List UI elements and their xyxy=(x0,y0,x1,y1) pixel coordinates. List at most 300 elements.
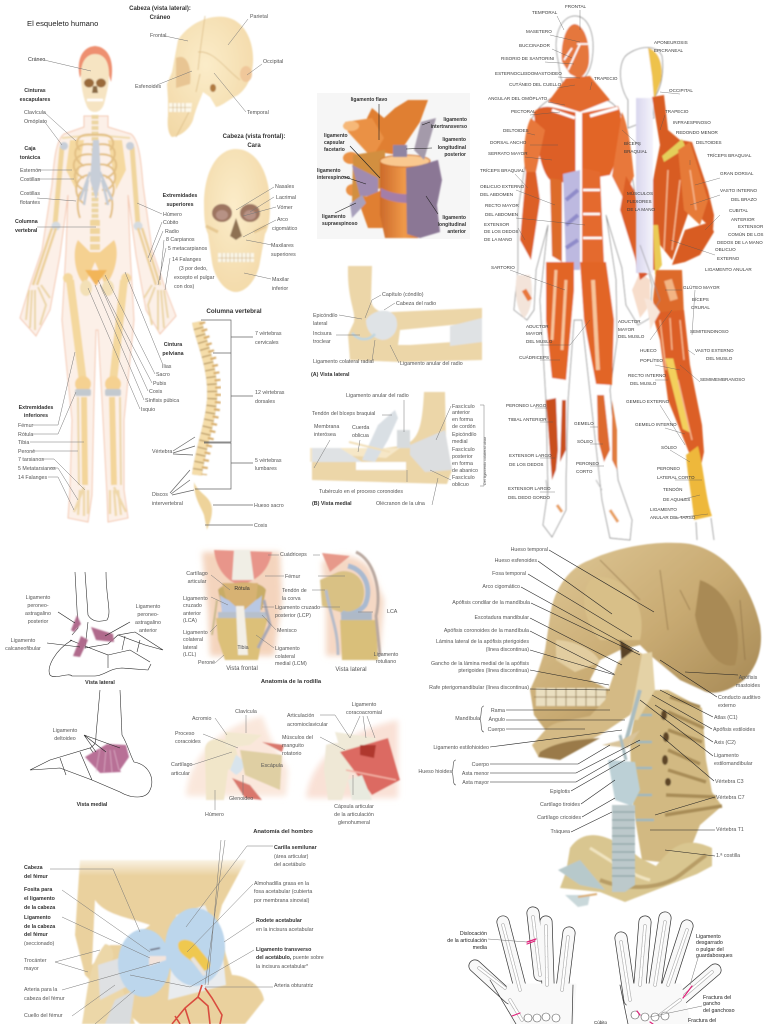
elbow medial labels: Fascículo xyxy=(452,475,475,481)
skeleton labels: Clavícula xyxy=(24,110,46,116)
hip labels: el ligamento xyxy=(24,896,56,902)
elbow medial labels: Tubérculo en el proceso coronoides xyxy=(319,489,403,495)
head and neck labels: pterigoides (línea discontinua) xyxy=(458,668,529,674)
illustration: full skeleton xyxy=(20,46,176,522)
hand right labels: del ganchoso xyxy=(703,1008,735,1014)
elbow lateral labels: Epicóndilo xyxy=(313,313,337,319)
elbow medial labels: posterior xyxy=(452,454,473,460)
skeleton labels: Sínfisis púbica xyxy=(145,398,179,404)
muscle labels: DEDOS DE LA MANO xyxy=(717,240,763,245)
elbow medial labels: Membrana xyxy=(314,424,339,430)
head and neck labels: Apófisis estiloides xyxy=(713,727,755,733)
skeleton leader lines xyxy=(30,60,170,510)
lateral skull labels: Esfenoides xyxy=(135,84,162,90)
muscle labels: CORTO xyxy=(576,469,593,474)
frontal skull labels: inferior xyxy=(272,286,288,292)
muscle labels: INFRAESPINOSO xyxy=(673,120,711,125)
illustration: hand outline left xyxy=(475,913,575,1024)
muscle labels: DEL ABDOMEN xyxy=(485,212,518,217)
muscle labels: FRONTAL xyxy=(565,4,587,9)
muscle labels: TRÍCEPS BRAQUIAL xyxy=(707,152,752,158)
panel: head and neck xyxy=(418,543,761,907)
shoulder labels: Ligamento xyxy=(352,702,376,708)
lateral skull labels: Cráneo xyxy=(150,15,171,21)
elbow medial labels: en forma xyxy=(452,417,473,423)
hand right labels: desgarrado xyxy=(696,940,723,946)
vertebra labels: longitudinal xyxy=(438,145,467,151)
knee labels: cruzado xyxy=(183,603,202,609)
head and neck labels: Apófisis xyxy=(739,675,758,681)
ankle medial labels: Vista medial xyxy=(77,802,108,808)
skeleton labels xyxy=(15,57,215,481)
illustration: vertebrae xyxy=(343,100,442,238)
panel: human skeleton xyxy=(15,19,215,522)
elbow lateral labels xyxy=(311,292,463,378)
hand right labels: gancho xyxy=(703,1001,720,1007)
head and neck labels: Conducto auditivo xyxy=(718,695,760,701)
vertebra labels: ligamento xyxy=(324,133,348,139)
knee labels: anterior xyxy=(183,611,201,617)
muscle labels: DEL MUSLO xyxy=(630,381,657,386)
illustration: larynx and trachea xyxy=(565,730,640,907)
skeleton labels: Radio xyxy=(165,229,179,235)
elbow medial labels: Ligamento anular del radio xyxy=(346,393,409,399)
head and neck labels: Ángulo xyxy=(488,716,505,723)
muscle labels: SÓLEO xyxy=(661,444,677,450)
frontal skull labels xyxy=(223,134,297,292)
illustration: elbow medial xyxy=(310,392,452,484)
shoulder labels: Cartílago xyxy=(171,762,193,768)
skeleton labels: Caja xyxy=(24,146,36,152)
hand right labels: o pulgar del xyxy=(696,947,724,953)
muscle labels: LIGAMENTO xyxy=(650,507,677,512)
muscle labels: TIBIAL ANTERIOR xyxy=(508,417,547,422)
knee labels: medial (LCM) xyxy=(275,661,307,667)
head and neck labels: 1.ª costilla xyxy=(716,853,740,859)
vertebra labels: facetario xyxy=(324,147,345,153)
knee labels: Anatomía de la rodilla xyxy=(261,679,322,685)
muscle labels: DEL MUSLO xyxy=(526,339,553,344)
muscle labels: SERRATO MAYOR xyxy=(488,151,528,156)
head and neck labels: Hueso esfenoides xyxy=(495,558,537,564)
elbow medial labels: Cuerda xyxy=(352,425,369,431)
muscle labels: RISORIO DE SANTORINI xyxy=(501,56,554,61)
head and neck labels: Mandíbula xyxy=(455,716,480,722)
ankle lateral labels: anterior xyxy=(139,628,157,634)
muscle labels: TENDÓN xyxy=(663,486,682,492)
shoulder labels: acromioclavicular xyxy=(287,722,328,728)
elbow lateral leader lines xyxy=(336,295,399,363)
muscle labels: CUTÁNEO DEL CUELLO xyxy=(509,81,562,87)
skeleton labels: Omóplato xyxy=(24,119,47,125)
head and neck labels: Epiglotis xyxy=(550,789,570,795)
muscle labels: BUCCINADOR xyxy=(519,43,551,48)
lateral skull labels: Parietal xyxy=(250,14,268,20)
knee labels: Cuádriceps xyxy=(280,552,307,558)
panel: knee anatomy xyxy=(183,550,398,685)
shoulder labels: Escápula xyxy=(261,763,283,769)
muscle labels: OBLICUO EXTERNO xyxy=(480,184,525,189)
illustration: neck spine and ribs xyxy=(558,690,722,902)
spine brackets xyxy=(170,320,253,525)
panel: hand left xyxy=(447,913,607,1024)
muscle labels: HUECO xyxy=(640,348,657,353)
elbow medial labels: Del ligamento colateral ulnar xyxy=(483,436,487,485)
muscle labels: RECTO MAYOR xyxy=(485,203,519,208)
muscle labels: SARTORIO xyxy=(491,265,515,270)
shoulder labels: glenohumeral xyxy=(338,820,370,826)
elbow medial labels: medial xyxy=(452,439,468,445)
spine labels: dorsales xyxy=(255,399,275,405)
lateral skull labels xyxy=(129,6,283,116)
muscle labels: SEMITENDINOSO xyxy=(690,329,729,334)
skeleton labels: Costillas xyxy=(20,191,40,197)
elbow medial labels: interósea xyxy=(314,432,336,438)
ankle lateral labels: posterior xyxy=(28,619,49,625)
head and neck labels: Rafe pterigomandibular (línea discontinua) xyxy=(429,685,529,691)
frontal skull labels: Nasales xyxy=(275,184,294,190)
shoulder labels: coracoacromial xyxy=(346,710,382,716)
panel: elbow medial view xyxy=(310,392,487,507)
elbow medial labels: Tendón del bíceps braquial xyxy=(312,411,375,417)
knee labels: Vista lateral xyxy=(335,667,367,673)
elbow lateral labels: Cabeza del radio xyxy=(396,301,436,307)
illustration: lateral skull xyxy=(167,16,253,137)
spine labels: 12 vértebras xyxy=(255,390,285,396)
shoulder labels: Húmero xyxy=(205,812,224,818)
muscle labels: ANGULAR DEL OMÓPLATO xyxy=(488,95,548,101)
illustration: ankle bones lateral xyxy=(49,572,163,677)
muscle labels: CUBITAL xyxy=(729,208,749,213)
muscle labels: ESTERNOCLEIDOMASTOIDEO xyxy=(495,71,562,76)
frontal skull labels: Maxilar xyxy=(272,277,289,283)
spine labels: lumbares xyxy=(255,466,277,472)
knee labels: la corva xyxy=(282,596,301,602)
muscle labels: TRÍCEPS BRAQUIAL xyxy=(480,167,525,173)
illustration: frontal knee xyxy=(202,550,282,660)
ligament patches lateral xyxy=(71,615,114,657)
muscle labels: BÍCEPS xyxy=(692,296,709,302)
skeleton labels: Húmero xyxy=(163,212,182,218)
muscle labels: DE LOS DEDOS xyxy=(509,462,543,467)
skeleton labels: Sacro xyxy=(156,372,170,378)
muscle labels: MAYOR xyxy=(526,331,543,336)
vertebra labels: longitudinal xyxy=(438,222,467,228)
elbow medial labels: Fascículo xyxy=(452,447,475,453)
bracket hyoid xyxy=(452,760,456,785)
hip labels: Fosita para xyxy=(24,887,52,893)
hip labels: Arteria para la xyxy=(24,987,57,993)
skeleton labels: Extremidades xyxy=(19,405,53,411)
head and neck labels: mastoides xyxy=(736,683,760,689)
elbow lateral labels: lateral xyxy=(313,321,327,327)
elbow medial labels: oblicua xyxy=(352,433,369,439)
illustration: front muscle figure xyxy=(514,16,652,540)
head and neck labels: Hueso hioides xyxy=(418,769,452,775)
muscle labels: COMÚN DE LOS xyxy=(728,231,763,237)
lateral skull labels: Frontal xyxy=(150,33,166,39)
ankle lateral labels: calcaneofibular xyxy=(5,646,41,652)
muscle labels: ANULAR DEL TARSO xyxy=(650,515,696,520)
head and neck labels: Cartílago tiroides xyxy=(540,802,580,808)
vertebra labels: anterior xyxy=(447,229,466,235)
muscle labels: EXTERNO xyxy=(717,256,740,261)
head and neck labels: estilomandibular xyxy=(714,761,753,767)
muscle labels: EXTENSOR LARGO xyxy=(508,486,551,491)
elbow medial labels: anterior xyxy=(452,410,470,416)
ankle lateral labels: Ligamento xyxy=(136,604,160,610)
muscle labels: TEMPORAL xyxy=(532,10,558,15)
skeleton labels: Columna xyxy=(15,219,38,225)
hand left labels: Dislocación xyxy=(460,931,487,937)
frontal skull labels: Arco xyxy=(277,217,288,223)
head and neck labels: Vértebra C3 xyxy=(715,779,744,785)
skeleton labels: Rótula xyxy=(18,432,33,438)
head and neck labels: Vértebra C7 xyxy=(716,795,745,801)
frontal skull labels: Cabeza (vista frontal): xyxy=(223,134,285,140)
muscle labels: PERONEO xyxy=(576,461,599,466)
illustration: shoulder front xyxy=(186,716,288,800)
knee labels: lateral xyxy=(183,645,197,651)
muscle labels: DORSAL ANCHO xyxy=(490,140,527,145)
vertebra leader lines xyxy=(335,104,438,214)
panel: frontal skull xyxy=(204,134,297,292)
muscle labels: CRURAL xyxy=(691,305,710,310)
lateral skull labels: Cabeza (vista lateral): xyxy=(129,6,191,12)
muscle labels: BÍCEPS xyxy=(624,140,641,146)
ankle medial leader lines xyxy=(84,735,120,752)
illustration: lateral knee xyxy=(320,552,384,660)
vertebra labels: ligamento xyxy=(322,214,346,220)
muscle labels: PERONEO xyxy=(657,466,680,471)
knee labels: (LCL) xyxy=(183,652,196,658)
illustration: obturator arteries xyxy=(172,985,222,1024)
skeleton labels: Ilias xyxy=(162,364,172,370)
muscle labels xyxy=(480,4,764,520)
hip labels: Ligamento transverso xyxy=(256,947,312,953)
hip labels: por membrana sinovial) xyxy=(254,898,310,904)
skeleton labels: 5 metacarpianos xyxy=(168,246,208,252)
elbow medial labels: (B) Vista medial xyxy=(312,501,352,507)
muscle labels: SÓLEO xyxy=(577,438,593,444)
hip labels: Cabeza xyxy=(24,865,43,871)
spine labels: Hueso sacro xyxy=(254,503,284,509)
hip labels xyxy=(24,845,324,1019)
muscle labels: MAYOR xyxy=(618,327,635,332)
ankle lateral labels: Ligamento xyxy=(11,638,35,644)
muscle labels: SEMIMEMBRANOSO xyxy=(700,377,745,382)
skeleton labels: (3 por dedo, xyxy=(179,266,208,272)
skeleton labels: Extremidades xyxy=(163,193,197,199)
muscle labels: EXTENSOR LARGO xyxy=(509,453,552,458)
lateral skull leader lines xyxy=(157,19,262,112)
ankle medial labels: deltoideo xyxy=(54,736,76,742)
shoulder labels: Músculos del xyxy=(282,735,313,741)
knee labels: colateral xyxy=(183,637,203,643)
hip labels: Arteria obturatriz xyxy=(274,983,314,989)
knee labels: Tendón de xyxy=(282,588,307,594)
frontal skull labels: Vómer xyxy=(277,205,293,211)
ankle medial labels xyxy=(53,728,108,808)
skeleton labels: 7 tarsianos xyxy=(18,457,44,463)
vertebra labels: interespinoso xyxy=(317,175,350,181)
panel: hip joint xyxy=(24,840,324,1024)
head and neck labels: Asta mayor xyxy=(462,780,489,786)
muscle labels: GLÚTEO MAYOR xyxy=(683,284,720,290)
skeleton labels: Costillas xyxy=(20,177,40,183)
frontal skull labels: superiores xyxy=(271,252,296,258)
hip labels: Almohadilla grasa en la xyxy=(254,881,309,887)
panel: shoulder anatomy xyxy=(171,702,400,835)
shoulder labels: Clavícula xyxy=(235,709,257,715)
hip labels: de la cabeza xyxy=(24,924,55,930)
muscle labels: PERONEO LARGO xyxy=(506,403,547,408)
frontal skull labels: cigomático xyxy=(272,226,297,232)
muscle labels: EXTENSOR xyxy=(484,222,510,227)
vertebra labels: capsular xyxy=(324,140,345,146)
hip labels: mayor xyxy=(24,966,39,972)
knee labels: colateral xyxy=(275,654,295,660)
skeleton labels: torácica xyxy=(20,155,40,161)
illustration: elbow lateral xyxy=(348,266,482,362)
knee labels: Ligamento cruzado xyxy=(275,605,320,611)
ankle lateral labels: Ligamento xyxy=(26,595,50,601)
frontal skull labels: Maxilares xyxy=(271,243,294,249)
skeleton labels: flotantes xyxy=(20,200,40,206)
elbow lateral labels: (A) Vista lateral xyxy=(311,372,350,378)
skeleton labels: Isquio xyxy=(141,407,155,413)
head and neck labels: Ligamento estilohioideo xyxy=(433,745,489,751)
spine labels: cervicales xyxy=(255,340,279,346)
muscle labels: EPICRANEAL xyxy=(654,48,684,53)
muscle labels: PECTORAL xyxy=(511,109,536,114)
illustration: frontal skull xyxy=(204,149,270,292)
head and neck labels: (línea discontinua) xyxy=(486,647,529,653)
head and neck labels: Cuerpo xyxy=(488,727,505,733)
muscle labels: DE LA MANO xyxy=(484,237,513,242)
hand left labels: de la articulación xyxy=(447,938,487,944)
shoulder labels: Glenoideo xyxy=(229,796,253,802)
shoulder labels: Cápsula articular xyxy=(334,804,374,810)
ligament patch medial xyxy=(85,744,129,773)
knee labels: articular xyxy=(188,579,207,585)
muscle labels: FLEXORES xyxy=(627,199,652,204)
shoulder labels: Acromio xyxy=(192,716,211,722)
muscle labels: BRAQUIAL xyxy=(624,149,648,154)
head and neck labels: Escotadura mandibular xyxy=(475,615,529,621)
hand right labels xyxy=(688,934,735,1024)
skeleton labels: Coxis xyxy=(149,389,163,395)
spine labels: 5 vértebras xyxy=(255,458,282,464)
hip labels: Ligamento xyxy=(24,915,52,921)
elbow medial labels: Fascículo xyxy=(452,404,475,410)
illustration: spine xyxy=(194,322,218,530)
muscle labels: DEL ABDOMEN xyxy=(480,192,513,197)
muscle labels: APONEUROSIS xyxy=(654,40,688,45)
knee labels: LCA xyxy=(387,609,398,615)
head and neck labels: Tráquea xyxy=(550,829,570,835)
skeleton labels: vertebral xyxy=(15,228,38,234)
muscle labels: DELTOIDES xyxy=(503,128,529,133)
skeleton labels: con dos) xyxy=(174,284,195,290)
shoulder labels: articular xyxy=(171,771,190,777)
muscle labels: EXTENSOR xyxy=(738,224,764,229)
illustration: pelvis and femur xyxy=(75,860,264,1024)
hip labels: Trocánter xyxy=(24,958,47,964)
head and neck labels: Apófisis coronoides de la mandíbula xyxy=(444,628,529,634)
hip labels: cabeza del fémur xyxy=(24,996,65,1002)
hand right labels: Ligamento xyxy=(696,934,721,940)
illustration: hand outline right xyxy=(620,918,715,1024)
skeleton labels: Peroné xyxy=(18,449,35,455)
head and neck labels: Cartílago cricoides xyxy=(537,815,581,821)
spine labels: Discos xyxy=(152,492,168,498)
shoulder leader lines xyxy=(192,715,375,810)
muscle labels: DELTOIDES xyxy=(696,140,722,145)
shoulder labels: rotatorio xyxy=(282,751,301,757)
lateral skull labels: Temporal xyxy=(247,110,269,116)
vertebra labels: ligamento xyxy=(443,117,467,123)
skeleton labels: Cintura xyxy=(164,342,182,348)
head and neck labels: Gancho de la lámina medial de la apófisis xyxy=(431,661,529,667)
knee labels: Tibia xyxy=(237,645,249,651)
knee leader lines xyxy=(210,555,373,663)
head and neck labels: Lámina lateral de la apófisis pterigoides xyxy=(436,639,529,645)
vertebra labels xyxy=(317,97,467,235)
skeleton labels: Pubis xyxy=(153,381,167,387)
skeleton labels: 14 Falanges xyxy=(172,257,202,263)
muscle labels: GEMELO xyxy=(574,421,594,426)
knee labels: (LCA) xyxy=(183,618,197,624)
hand left labels xyxy=(447,931,607,1024)
head and neck labels: Atlas (C1) xyxy=(714,715,738,721)
muscle labels: DE LA MANO xyxy=(627,207,656,212)
hand left labels: media xyxy=(473,945,487,951)
muscle labels: ADUCTOR xyxy=(526,324,549,329)
knee labels: Cartílago xyxy=(186,571,208,577)
skeleton labels: 8 Carpianos xyxy=(166,237,195,243)
ankle lateral labels: Vista lateral xyxy=(85,680,115,686)
muscle labels: MASETERO xyxy=(526,29,552,34)
muscle labels: OCCIPITAL xyxy=(669,88,693,93)
knee labels: Vista frontal xyxy=(226,666,258,672)
muscle labels: REDONDO MENOR xyxy=(676,130,719,135)
elbow medial labels: Epicóndilo xyxy=(452,432,476,438)
vertebra labels: ligamento xyxy=(317,168,341,174)
muscle labels: DEL BRAZO xyxy=(731,197,757,202)
hip labels: fosa acetabular (cubierta xyxy=(254,889,312,895)
head and neck labels: Ligamento xyxy=(714,753,739,759)
elbow lateral labels: Ligamento anular del radio xyxy=(400,361,463,367)
shoulder labels: manguito xyxy=(282,743,304,749)
panel: muscular system xyxy=(480,4,764,540)
skeleton labels: Fémur xyxy=(18,423,34,429)
shoulder labels: de la articulación xyxy=(334,812,374,818)
muscle labels: ANTERIOR xyxy=(731,217,755,222)
elbow medial labels: Olécranon de la ulna xyxy=(376,501,425,507)
bracket mandible xyxy=(480,706,484,732)
muscle labels: DE AQUILES xyxy=(663,497,690,502)
knee labels: Fémur xyxy=(285,574,301,580)
lateral skull labels: Occipital xyxy=(263,59,283,65)
hand right labels: Fractura del xyxy=(688,1018,716,1024)
hip labels: (área articular) xyxy=(274,854,309,860)
skeleton labels: 14 Falanges xyxy=(18,475,48,481)
head and neck labels: Rama xyxy=(491,708,505,714)
frontal skull labels: Cara xyxy=(247,143,261,149)
spine labels: 7 vértebras xyxy=(255,331,282,337)
muscle labels: DE LOS DEDOS xyxy=(484,229,518,234)
